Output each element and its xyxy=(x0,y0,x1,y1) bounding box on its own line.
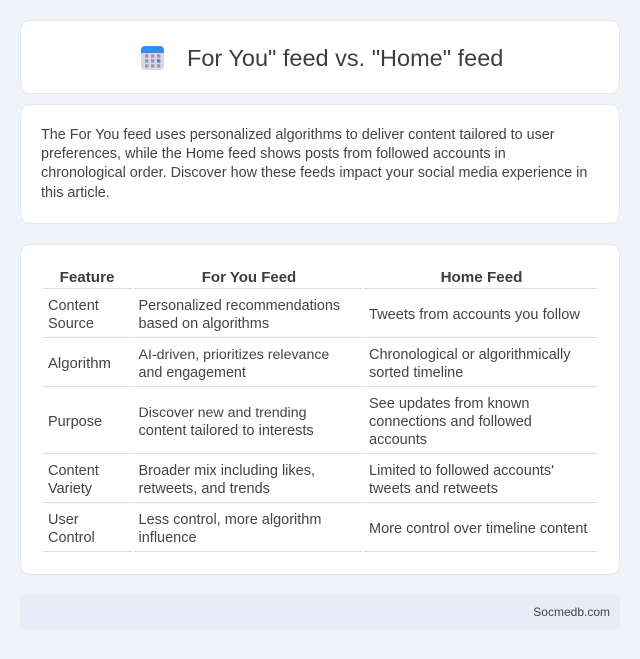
row: algorithm: AI-driven, prioritizes relevance xyxy=(138,347,329,363)
intro text: chronological order. Discover how these feeds impact your social media experience in xyxy=(41,165,587,181)
row: algorithm: and engagement xyxy=(138,365,246,381)
row: user control: More control over timeline content xyxy=(369,521,587,537)
panel: introduction xyxy=(20,104,620,224)
row: algorithm: Chronological or algorithmically xyxy=(369,347,570,363)
row: content source: Tweets from accounts you follow xyxy=(369,307,580,323)
row: content source xyxy=(48,298,580,332)
row: purpose: content tailored to interests xyxy=(138,423,314,439)
row: purpose: See updates from known xyxy=(369,396,529,412)
row: algorithm: sorted timeline xyxy=(369,365,463,381)
row: user control: Less control, more algorithm xyxy=(138,512,321,528)
intro text: this article. xyxy=(41,185,110,201)
table header: For You Feed xyxy=(202,269,296,286)
row: user control: User xyxy=(48,512,79,528)
row: content variety: Variety xyxy=(48,481,92,497)
row: content source: Personalized recommendations xyxy=(138,298,340,314)
intro text: The For You feed uses personalized algorithms to deliver content tailored to user xyxy=(41,127,555,143)
row: algorithm: Algorithm xyxy=(48,356,111,372)
row: content variety: retweets, and trends xyxy=(138,481,270,497)
panel: comparison table xyxy=(20,244,620,575)
row: content source: Content xyxy=(48,298,99,314)
footer bar xyxy=(20,595,620,629)
icon: calendar xyxy=(141,46,164,70)
row: purpose xyxy=(48,396,532,448)
row: purpose: connections and followed xyxy=(369,414,532,430)
table header xyxy=(60,269,522,286)
row: content source: based on algorithms xyxy=(138,316,269,332)
footer text: Socmedb.com xyxy=(533,605,610,619)
row: content variety xyxy=(48,463,554,497)
row: content variety: tweets and retweets xyxy=(369,481,498,497)
table header: Feature xyxy=(60,269,114,286)
row: purpose: Purpose xyxy=(48,414,102,430)
panel: title card xyxy=(20,20,620,94)
row: user control: Control xyxy=(48,530,95,546)
row: content source: Source xyxy=(48,316,94,332)
row: user control: influence xyxy=(138,530,197,546)
table header: Home Feed xyxy=(441,269,522,286)
row: content variety: Content xyxy=(48,463,99,479)
title: For You" feed vs. "Home" feed xyxy=(187,45,503,71)
row: purpose: accounts xyxy=(369,432,427,448)
row: content variety: Limited to followed accounts' xyxy=(369,463,554,479)
intro text xyxy=(41,127,587,201)
row: algorithm xyxy=(48,347,570,381)
row: user control xyxy=(48,512,588,546)
intro text: preferences, while the Home feed shows posts from followed accounts in xyxy=(41,146,506,162)
row: content variety: Broader mix including likes, xyxy=(138,463,315,479)
row: purpose: Discover new and trending xyxy=(138,405,306,421)
